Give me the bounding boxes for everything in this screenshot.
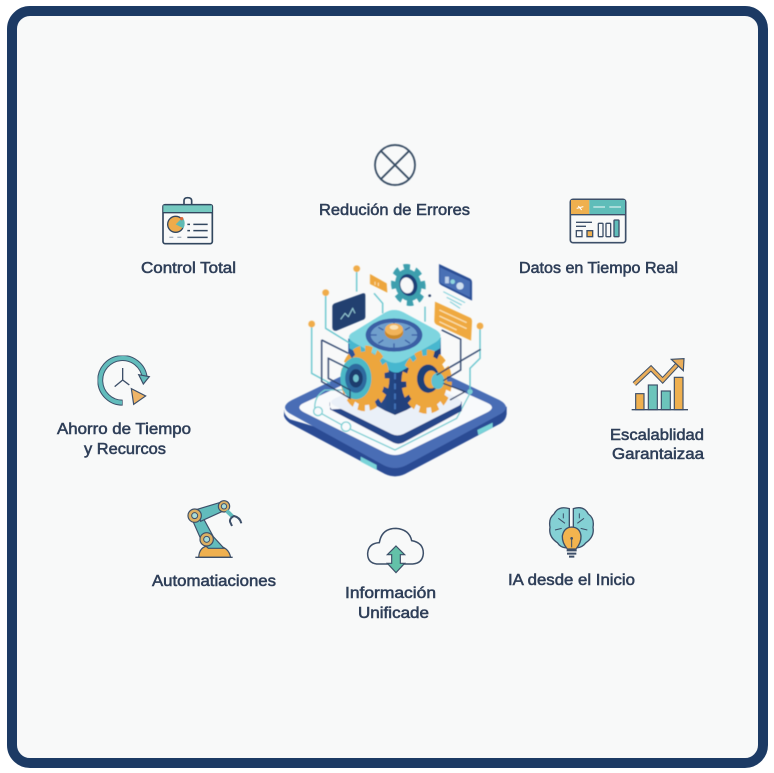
item: Información Unificada [345,528,440,622]
icon: crossed circle [375,145,415,185]
item: IA desde el Inicio [508,508,635,589]
item: Control Total [141,198,236,277]
floating blue data card [439,264,472,308]
label: Automatiaciones [152,573,276,590]
icon: growth chart [632,359,688,410]
icon: cloud with sync arrow [368,528,423,573]
label first and second line: Unificade [358,605,429,622]
connector wires [312,269,481,400]
label first and second line: Información [345,585,436,602]
central illustration: isometric automation cube [284,263,507,476]
left gear [340,349,387,407]
inner base plate [329,372,462,444]
floating small orange card [370,274,387,293]
item: Escalabilidad Garantizada [610,359,708,463]
orange wire dots [308,265,483,329]
item: Reducción de errores [319,145,470,219]
label: Redución de Errores [319,202,470,219]
floating navy chart card [332,293,365,331]
platform outer [284,353,507,476]
right gear [404,353,449,410]
item: Ahorro de Tiempo y Recursos [57,358,195,458]
icon: analytics window [570,199,626,243]
icon: brain with light bulb [550,508,593,557]
label: IA desde el Inicio [508,572,635,589]
label: Control Total [141,260,236,277]
cube body [348,337,441,415]
icon: clock arrow [100,358,149,404]
label: Datos en Tiempo Real [519,260,678,277]
circuit traces on platform [314,390,472,450]
cube top [349,310,441,373]
item: Datos en Tiempo Real [519,199,678,277]
floating orange text card [434,302,472,341]
item: Automatizaciones [152,501,276,590]
label first and second line: y Recurcos [84,441,166,458]
floating teal gear [389,263,427,307]
icon: dashboard card [163,198,212,244]
label first and second line: Escalablidad [610,427,704,444]
icon: robot arm [188,501,241,557]
label first and second line: Garantaizaa [612,446,704,463]
label first and second line: Ahorro de Tiempo [57,421,191,438]
